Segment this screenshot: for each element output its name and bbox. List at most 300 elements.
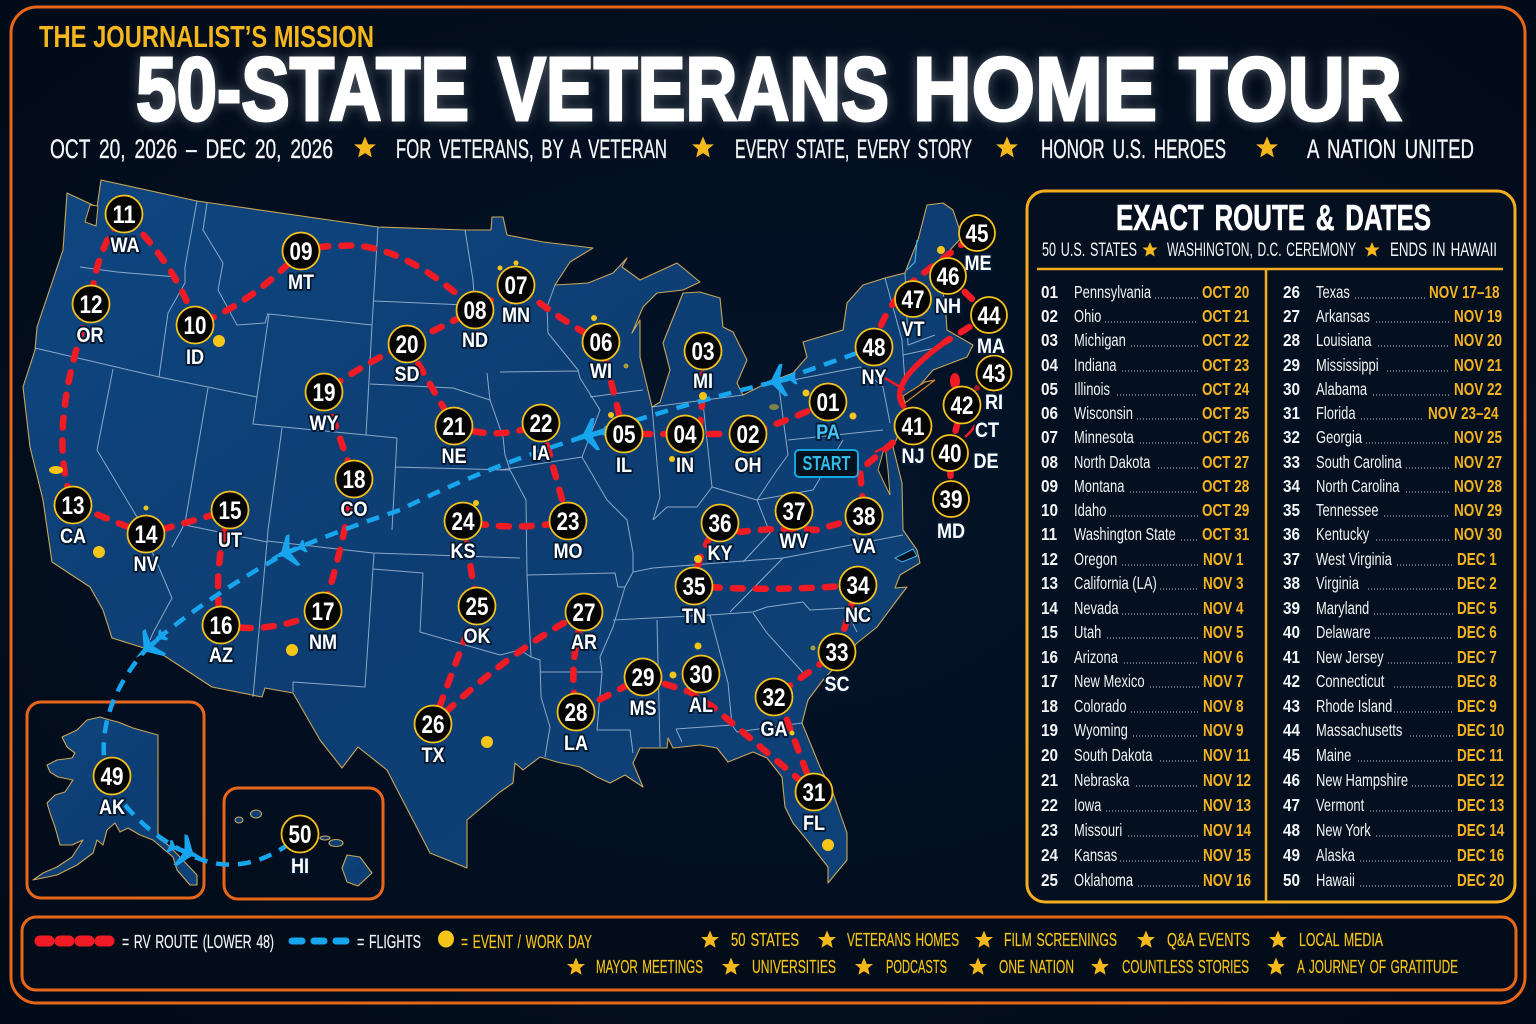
inset: Hawaii [224, 788, 383, 899]
marker 35 TN: 35 [682, 573, 706, 601]
marker 31 FL: FL [803, 812, 825, 835]
marker 28 LA: 28 [564, 699, 588, 727]
marker 06 WI [582, 324, 620, 383]
route table: stops 01 to 25: 14 [1041, 598, 1059, 618]
route table: stops 01 to 25: 17 [1041, 671, 1058, 691]
marker 02 OH: 02 [736, 421, 760, 449]
route table: stops 26 to 50: 38 [1283, 573, 1300, 593]
legend: highlights row one: 50 STATES [731, 930, 799, 950]
marker 34 NC [840, 566, 876, 627]
marker 14 NV: NV [133, 553, 159, 576]
route table: stops 01 to 25: NOV 15 [1203, 846, 1251, 866]
route table: stops 01 to 25: NOV 1 [1203, 550, 1244, 570]
marker 13 CA: CA [60, 525, 86, 548]
marker 27 AR: AR [571, 631, 597, 654]
marker 05 IL: 05 [612, 421, 636, 449]
route table: stops 26 to 50: 48 [1283, 820, 1300, 840]
route table: stops 01 to 25: Nevada [1074, 599, 1119, 619]
route table: stops 26 to 50: 47 [1283, 795, 1300, 815]
route table: stops 26 to 50: DEC 10 [1457, 721, 1504, 741]
marker 11 WA: 11 [112, 201, 136, 229]
route table: stops 01 to 25: NOV 3 [1203, 574, 1244, 594]
marker 02 OH [730, 416, 766, 477]
route table: stops 01 to 25: NOV 13 [1203, 796, 1251, 816]
marker 34 NC: 34 [846, 572, 870, 600]
route table: stops 26 to 50: Alabama [1316, 380, 1367, 400]
route table: stops 26 to 50: DEC 5 [1457, 599, 1497, 619]
marker 25 OK: OK [463, 625, 491, 648]
route table: stops 26 to 50: Tennessee [1316, 501, 1379, 521]
marker 23 MO: MO [553, 540, 583, 563]
route table: stops 01 to 25: NOV 7 [1203, 672, 1244, 692]
legend: highlights row two: PODCASTS [886, 957, 947, 977]
marker 10 ID [176, 306, 214, 369]
marker 33 SC: 33 [826, 639, 848, 667]
route table: stops 26 to 50: NOV 20 [1454, 331, 1502, 351]
route table: stops 26 to 50: South Carolina [1316, 453, 1402, 473]
marker 16 AZ: 16 [210, 612, 232, 640]
eyebrow: the journalist's mission: THE JOURNALIST’S MISSION [39, 19, 374, 54]
marker 11 WA: WA [110, 234, 140, 257]
marker 29 MS: MS [629, 697, 657, 720]
marker 24 KS: KS [450, 540, 476, 563]
marker 12 OR: OR [76, 324, 104, 347]
route table: stops 26 to 50: NOV 17–18 [1429, 283, 1500, 303]
marker 14 NV: 14 [134, 521, 158, 549]
route table: stops 26 to 50 [1283, 282, 1504, 891]
marker 10 ID: ID [186, 346, 204, 369]
route table: stops 26 to 50: Rhode Island [1316, 697, 1392, 717]
marker 32 GA [756, 678, 792, 741]
route table: stops 01 to 25: Utah [1074, 623, 1101, 643]
marker 21 NE [436, 408, 472, 468]
marker 49 AK: AK [99, 796, 125, 819]
legend: flights [292, 932, 421, 952]
route table: stops 26 to 50: NOV 29 [1454, 501, 1502, 521]
marker 25 OK: 25 [466, 593, 489, 621]
route table: stops 01 to 25: 10 [1041, 500, 1058, 520]
marker 20 SD [388, 326, 426, 386]
route table: stops 01 to 25: 04 [1041, 355, 1059, 375]
route table: stops 26 to 50: NOV 19 [1454, 307, 1502, 327]
route table: stops 26 to 50: 33 [1283, 452, 1300, 472]
route table: stops 26 to 50: 37 [1283, 549, 1300, 569]
marker 36 KY: 36 [708, 510, 732, 538]
route table: stops 01 to 25: OCT 26 [1202, 428, 1249, 448]
route table: stops 26 to 50: 31 [1283, 403, 1300, 423]
route table: stops 26 to 50: Massachusetts [1316, 721, 1403, 741]
marker 01 PA with start tag: 01 [816, 389, 840, 417]
route table: stops 01 to 25: 01 [1041, 282, 1058, 302]
route table: stops 01 to 25: 05 [1041, 379, 1058, 399]
marker 38 VA: 38 [852, 503, 876, 531]
route table: stops 01 to 25: 06 [1041, 403, 1058, 423]
route table: stops 26 to 50: NOV 30 [1454, 525, 1502, 545]
route table: stops 26 to 50: DEC 12 [1457, 771, 1504, 791]
subtitle strip: FOR VETERANS, BY A VETERAN [396, 134, 667, 164]
route table: stops 26 to 50: Arkansas [1316, 307, 1370, 327]
legend: highlights row one: VETERANS HOMES [847, 930, 959, 950]
marker 05 IL: IL [616, 454, 632, 477]
marker 45 ME: 45 [966, 220, 989, 248]
route table: stops 01 to 25: OCT 28 [1202, 477, 1249, 497]
route table: stops 01 to 25: Washington State [1074, 525, 1176, 545]
marker 15 UT [212, 492, 248, 552]
route table: stops 01 to 25: 07 [1041, 427, 1058, 447]
marker 49 AK [94, 758, 130, 819]
marker 43 RI [976, 356, 1012, 414]
marker 21 NE: NE [441, 445, 467, 468]
route table: stops 26 to 50: 32 [1283, 427, 1300, 447]
subtitle strip: OCT 20, 2026 – DEC 20, 2026 [50, 134, 333, 164]
route table: stops 26 to 50: Alaska [1316, 846, 1355, 866]
route table: stops 01 to 25: 19 [1041, 720, 1058, 740]
route table: stops 01 to 25: Colorado [1074, 697, 1127, 717]
route table: stops 26 to 50: 40 [1283, 622, 1300, 642]
legend: highlights row two: MAYOR MEETINGS [596, 957, 703, 977]
marker 29 MS [624, 658, 662, 720]
route table: stops 26 to 50: 50 [1283, 870, 1300, 890]
plane icons [125, 362, 799, 874]
marker 07 MN: MN [502, 304, 530, 327]
route table: stops 26 to 50: DEC 9 [1457, 697, 1497, 717]
marker 30 AL [682, 656, 720, 717]
route table: stops 26 to 50: DEC 7 [1457, 648, 1497, 668]
marker 50 HI [282, 816, 318, 878]
route table: stops 01 to 25: OCT 21 [1202, 307, 1249, 327]
marker 23 MO: 23 [556, 508, 580, 536]
panel: exact route and dates [1027, 191, 1515, 902]
marker 26 TX [414, 706, 452, 767]
marker 18 CO: CO [340, 498, 368, 521]
legend: flights: = FLIGHTS [357, 932, 421, 952]
marker 22 IA [522, 404, 560, 465]
route table: stops 26 to 50: Vermont [1316, 796, 1365, 816]
marker 32 GA: GA [760, 718, 788, 741]
route table: stops 01 to 25: Iowa [1074, 796, 1102, 816]
route table: stops 26 to 50: DEC 14 [1457, 821, 1504, 841]
route table: stops 01 to 25: NOV 4 [1203, 599, 1244, 619]
route table: stops 01 to 25: 22 [1041, 795, 1058, 815]
route table: stops 01 to 25: California (LA) [1074, 574, 1157, 594]
marker 19 WY: WY [309, 412, 339, 435]
legend: highlights row one: FILM SCREENINGS [1004, 930, 1117, 950]
route table: stops 01 to 25: OCT 22 [1202, 331, 1249, 351]
route table: stops 01 to 25: NOV 6 [1203, 648, 1244, 668]
RV route [62, 214, 989, 792]
marker 40 DE: 40 [938, 440, 962, 468]
route table: stops 26 to 50: NOV 25 [1454, 428, 1502, 448]
route table: stops 01 to 25: 02 [1041, 306, 1058, 326]
route table: stops 26 to 50: DEC 13 [1457, 796, 1504, 816]
route table: stops 01 to 25: OCT 20 [1202, 283, 1249, 303]
legend: event / work day [438, 930, 592, 952]
marker 44 MA: 44 [978, 302, 1001, 330]
marker 41 NJ [894, 408, 932, 468]
route table: stops 26 to 50: North Carolina [1316, 477, 1400, 497]
marker 30 AL: AL [689, 694, 713, 717]
legend: highlights row one: LOCAL MEDIA [1299, 930, 1383, 950]
marker 38 VA: VA [852, 535, 876, 558]
legend: highlights row one: Q&A EVENTS [1167, 930, 1250, 950]
marker 09 MT [282, 232, 320, 294]
route table: stops 01 to 25: South Dakota [1074, 746, 1153, 766]
route table: stops 01 to 25: OCT 25 [1202, 404, 1249, 424]
marker 09 MT: 09 [290, 238, 312, 266]
route table: stops 26 to 50: DEC 8 [1457, 672, 1497, 692]
marker 24 KS [444, 502, 482, 563]
marker 06 WI: WI [590, 360, 612, 383]
marker 46 NH: 46 [936, 263, 960, 291]
route table: stops 01 to 25: OCT 27 [1202, 453, 1249, 473]
route table: stops 01 to 25: Michigan [1074, 331, 1126, 351]
marker 01 PA with start tag [795, 384, 858, 477]
title: VETERANS [498, 40, 889, 140]
route table: stops 26 to 50: 27 [1283, 306, 1300, 326]
marker 31 FL: 31 [802, 779, 826, 807]
route table: stops 01 to 25: 20 [1041, 745, 1058, 765]
marker 10 ID: 10 [184, 312, 206, 340]
legend: event / work day: = EVENT / WORK DAY [461, 932, 592, 952]
route table: stops 26 to 50: DEC 2 [1457, 574, 1497, 594]
marker 24 KS: 24 [452, 508, 475, 536]
marker 40 DE: DE [973, 450, 999, 473]
marker 48 NY [856, 328, 892, 389]
route table: stops 26 to 50: New Jersey [1316, 648, 1384, 668]
marker 41 NJ: 41 [902, 413, 925, 441]
flight route [104, 353, 857, 865]
route table: stops 26 to 50: 41 [1283, 647, 1300, 667]
marker 46 NH: NH [935, 295, 961, 318]
route table: stops 01 to 25: 12 [1041, 549, 1058, 569]
route table: stops 26 to 50: 46 [1283, 770, 1300, 790]
route table: stops 26 to 50: 36 [1283, 524, 1300, 544]
route table: stops 01 to 25: 18 [1041, 696, 1058, 716]
route table: stops 01 to 25: Oklahoma [1074, 871, 1133, 891]
route table: stops 26 to 50: Florida [1316, 404, 1356, 424]
route table: stops 26 to 50: Georgia [1316, 428, 1362, 448]
map: lower 48 states [23, 180, 973, 883]
route table: stops 01 to 25: Nebraska [1074, 771, 1130, 791]
route table: stops 26 to 50: NOV 23–24 [1428, 404, 1499, 424]
subtitle strip: EVERY STATE, EVERY STORY [735, 134, 972, 164]
marker 38 VA [846, 498, 882, 558]
route table: stops 01 to 25: 23 [1041, 820, 1058, 840]
marker 12 OR: 12 [80, 291, 102, 319]
panel subheading [1042, 240, 1497, 261]
route table: stops 26 to 50: NOV 28 [1454, 477, 1502, 497]
marker 03 MI: 03 [692, 338, 714, 366]
marker 23 MO [550, 502, 586, 563]
marker 03 MI [684, 332, 722, 393]
marker 15 UT: 15 [218, 497, 242, 525]
route table: stops 26 to 50: Maine [1316, 746, 1352, 766]
route table: stops 26 to 50: DEC 16 [1457, 846, 1504, 866]
route table: stops 26 to 50: DEC 20 [1457, 871, 1504, 891]
marker 06 WI: 06 [590, 329, 612, 357]
marker 42 CT: 42 [950, 392, 974, 420]
marker 17 NM: 17 [312, 598, 334, 626]
marker 11 WA [106, 196, 142, 257]
marker 04 IN: 04 [674, 421, 697, 449]
route table: stops 26 to 50: Mississippi [1316, 356, 1379, 376]
route table: stops 26 to 50: Maryland [1316, 599, 1369, 619]
marker 04 IN: IN [676, 454, 694, 477]
marker 26 TX: 26 [422, 711, 444, 739]
marker 20 SD: SD [394, 363, 420, 386]
event day dots [49, 246, 945, 851]
route table: stops 01 to 25: NOV 16 [1203, 871, 1251, 891]
marker 48 NY: NY [861, 366, 887, 389]
marker 36 KY [702, 504, 738, 565]
marker 28 LA [558, 694, 594, 755]
route table: stops 26 to 50: 49 [1283, 845, 1300, 865]
marker 47 VT [895, 281, 931, 341]
route table: stops 01 to 25: Wyoming [1074, 721, 1128, 741]
route table: stops 26 to 50: DEC 1 [1457, 550, 1497, 570]
marker 19 WY: 19 [312, 379, 336, 407]
route table: stops 01 to 25: Arizona [1074, 648, 1118, 668]
marker 36 KY: KY [707, 542, 733, 565]
inset: Alaska [27, 702, 204, 898]
route table: stops 01 to 25: Indiana [1074, 356, 1117, 376]
marker 43 RI: RI [985, 391, 1003, 414]
route table: stops 01 to 25: 16 [1041, 647, 1058, 667]
panel subheading: WASHINGTON, D.C. CEREMONY [1167, 240, 1356, 261]
route table: stops 26 to 50: 30 [1283, 379, 1300, 399]
legend: highlights row two: A JOURNEY OF GRATITUDE [1297, 957, 1458, 977]
route table: stops 26 to 50: 42 [1283, 671, 1300, 691]
marker 26 TX: TX [421, 744, 445, 767]
route table: stops 26 to 50: DEC 11 [1457, 746, 1504, 766]
route table: stops 01 to 25: 09 [1041, 476, 1058, 496]
marker 43 RI: 43 [982, 360, 1006, 388]
marker 30 AL: 30 [690, 661, 712, 689]
route table: stops 26 to 50: New Hampshire [1316, 771, 1408, 791]
marker 35 TN: TN [682, 605, 706, 628]
route table: stops 01 to 25: NOV 5 [1203, 623, 1244, 643]
marker 41 NJ: NJ [901, 445, 925, 468]
marker 44 MA: MA [977, 335, 1005, 358]
legend: highlights row two: COUNTLESS STORIES [1122, 957, 1249, 977]
marker 27 AR [566, 594, 602, 654]
marker 42 CT: CT [975, 419, 999, 442]
title [136, 40, 1402, 140]
title: HOME [913, 40, 1157, 140]
marker 01 PA with start tag: PA [816, 421, 840, 444]
marker 18 CO: 18 [342, 466, 366, 494]
marker 12 OR [72, 286, 110, 347]
route table: stops 01 to 25: NOV 8 [1203, 697, 1244, 717]
route table: stops 01 to 25 [1041, 282, 1251, 891]
route table: stops 01 to 25: North Dakota [1074, 453, 1151, 473]
marker 45 ME [959, 215, 995, 275]
marker 13 CA: 13 [62, 492, 84, 520]
marker 37 WV: 37 [782, 498, 806, 526]
legend: highlights row two: UNIVERSITIES [752, 957, 836, 977]
route table: stops 26 to 50: 29 [1283, 355, 1300, 375]
marker 32 GA: 32 [762, 684, 786, 712]
marker 45 ME: ME [964, 252, 992, 275]
route table: stops 26 to 50: Virginia [1316, 574, 1359, 594]
route table: stops 01 to 25: OCT 29 [1202, 501, 1249, 521]
marker 31 FL [796, 774, 832, 835]
marker 17 NM: NM [309, 631, 337, 654]
marker 07 MN: 07 [504, 272, 528, 300]
marker 16 AZ [202, 606, 240, 667]
route table: stops 26 to 50: NOV 27 [1454, 453, 1502, 473]
route table: stops 01 to 25: Ohio [1074, 307, 1102, 327]
route table: stops 01 to 25: OCT 23 [1202, 356, 1249, 376]
marker 07 MN [498, 266, 534, 327]
route table: stops 26 to 50: Louisiana [1316, 331, 1372, 351]
marker 22 IA: IA [532, 442, 550, 465]
marker 18 CO [336, 460, 372, 521]
route table: stops 01 to 25: Oregon [1074, 550, 1117, 570]
legend: highlights row two: ONE NATION [999, 957, 1074, 977]
route table: stops 01 to 25: NOV 11 [1203, 746, 1250, 766]
marker 48 NY: 48 [862, 334, 886, 362]
route table: stops 26 to 50: 45 [1283, 745, 1300, 765]
route table: stops 26 to 50: 35 [1283, 500, 1300, 520]
route table: stops 26 to 50: 28 [1283, 330, 1300, 350]
marker 37 WV: WV [779, 530, 809, 553]
route table: stops 01 to 25: 13 [1041, 573, 1058, 593]
marker 35 TN [676, 568, 712, 628]
route table: stops 01 to 25: Missouri [1074, 821, 1122, 841]
route table: stops 01 to 25: 08 [1041, 452, 1058, 472]
route table: stops 01 to 25: NOV 12 [1203, 771, 1251, 791]
marker 42 CT [944, 386, 999, 442]
legend: highlights row one [701, 930, 1383, 950]
route table: stops 01 to 25: Idaho [1074, 501, 1107, 521]
marker 04 IN [666, 416, 704, 477]
route table: stops 01 to 25: Montana [1074, 477, 1125, 497]
title: 50-STATE [136, 40, 469, 140]
marker 33 SC: SC [824, 673, 850, 696]
subtitle strip: HONOR U.S. HEROES [1041, 134, 1226, 164]
marker 25 OK [458, 588, 496, 648]
marker 34 NC: NC [845, 604, 871, 627]
marker 08 ND [456, 292, 494, 352]
marker 50 HI: 50 [288, 821, 312, 849]
marker 20 SD: 20 [396, 331, 418, 359]
route table: stops 01 to 25: 24 [1041, 845, 1059, 865]
route table: stops 01 to 25: Illinois [1074, 380, 1110, 400]
marker 40 DE [932, 435, 999, 473]
route table: stops 26 to 50: Texas [1316, 283, 1350, 303]
route table: stops 01 to 25: 03 [1041, 330, 1058, 350]
route table: stops 26 to 50: NOV 22 [1454, 380, 1502, 400]
marker 44 MA [971, 297, 1007, 358]
route table: stops 01 to 25: Pennsylvania [1074, 283, 1151, 303]
route table: stops 26 to 50: 39 [1283, 598, 1300, 618]
route table: stops 26 to 50: DEC 6 [1457, 623, 1497, 643]
panel subheading: 50 U.S. STATES [1042, 240, 1137, 261]
marker 08 ND: 08 [464, 297, 487, 325]
marker 01 PA with start tag: START [802, 453, 850, 475]
route table: stops 01 to 25: NOV 9 [1203, 721, 1244, 741]
marker 05 IL [606, 416, 642, 477]
marker 09 MT: MT [288, 271, 314, 294]
legend: highlights row two [567, 957, 1458, 977]
subtitle strip [50, 134, 1474, 164]
marker 46 NH [930, 258, 966, 318]
route table: stops 01 to 25: OCT 31 [1202, 525, 1249, 545]
marker 29 MS: 29 [632, 664, 654, 692]
route table: stops 01 to 25: Kansas [1074, 846, 1117, 866]
panel: legend [22, 917, 1516, 990]
